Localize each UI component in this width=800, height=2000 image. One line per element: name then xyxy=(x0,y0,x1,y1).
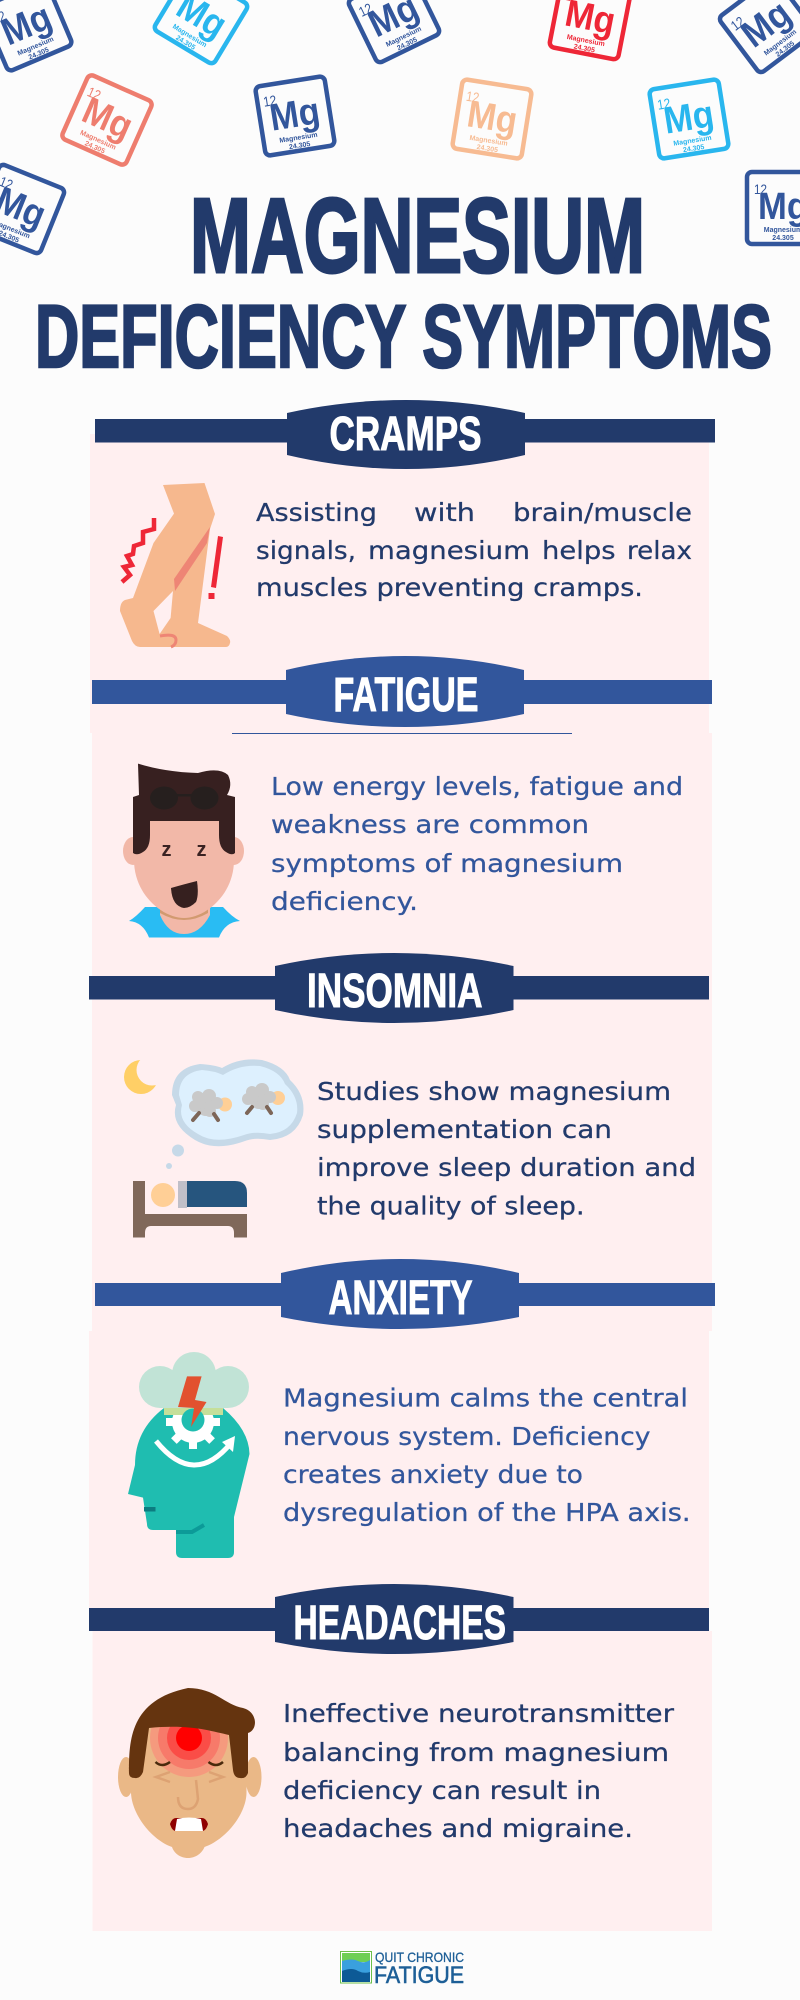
text: cramps description: magnesium xyxy=(368,536,530,565)
element tile: peach: 12 xyxy=(465,88,481,106)
element tile: peach: Magnesium xyxy=(469,135,508,148)
icon: man with headache xyxy=(118,1688,262,1858)
icon: sleeping man: z xyxy=(162,839,172,861)
element tile: salmon xyxy=(61,74,153,166)
element tile: cyan, top xyxy=(153,0,249,65)
text: fatigue description: deficiency. xyxy=(271,887,418,916)
element tile: blue, second row: Mg xyxy=(267,90,323,140)
element tile: salmon: 12 xyxy=(85,84,104,104)
banner: headaches xyxy=(89,1584,709,1654)
logo: Quit Chronic Fatigue xyxy=(340,1949,464,1989)
banner: fatigue xyxy=(92,656,712,727)
banner: cramps: CRAMPS xyxy=(330,408,482,461)
element tile: cyan, second row: Mg xyxy=(661,93,717,143)
element tile: peach xyxy=(452,79,532,159)
element tile: cyan, second row: 12 xyxy=(656,95,672,113)
text: anxiety description: nervous system. Deficiency xyxy=(283,1422,651,1451)
text: cramps description: brain/muscle xyxy=(513,498,692,527)
banner: cramps xyxy=(95,400,715,469)
text: insomnia description: the quality of sleep. xyxy=(317,1192,584,1220)
element tile: salmon: Magnesium xyxy=(79,130,117,152)
banner: anxiety xyxy=(95,1259,715,1329)
text: fatigue description: symptoms of magnesium xyxy=(271,849,623,878)
text: cramps description: signals, xyxy=(256,536,356,565)
element tile: red, top: 24.305 xyxy=(573,43,595,54)
text: cramps description: with xyxy=(414,498,475,527)
element tile: blue, top right: Magnesium xyxy=(763,29,798,57)
element tile: cyan, second row xyxy=(649,79,729,159)
text: fatigue description: weakness are common xyxy=(271,810,589,839)
title xyxy=(35,177,772,386)
banner: anxiety: ANXIETY xyxy=(328,1272,472,1325)
element tile: blue, second row: 12 xyxy=(262,92,278,110)
text: anxiety description: creates anxiety due to xyxy=(283,1460,583,1489)
element tile: blue, second row xyxy=(255,76,335,156)
fatigue divider line xyxy=(232,733,572,734)
element tile: blue, right edge: 12 xyxy=(754,181,767,197)
text: anxiety description: dysregulation of the HPA axis. xyxy=(283,1498,690,1527)
element tile: salmon: 24.305 xyxy=(83,140,106,155)
element tile: blue, top right xyxy=(718,0,800,74)
text: insomnia description xyxy=(317,1077,696,1220)
element tile: blue, second row: 24.305 xyxy=(289,141,311,151)
element tile: blue, top right: 24.305 xyxy=(775,40,796,59)
panel: anxiety xyxy=(89,1331,709,1631)
icon: head with storm cloud and gear xyxy=(128,1352,250,1558)
text: anxiety description xyxy=(283,1384,690,1527)
banner: insomnia: INSOMNIA xyxy=(307,965,482,1018)
text: headaches description xyxy=(283,1699,675,1843)
element tile: cyan, top: 24.305 xyxy=(174,35,196,52)
element tile: blue, right edge xyxy=(747,172,800,244)
panel: fatigue and insomnia xyxy=(92,733,712,1331)
text: fatigue description: Low energy levels, fatigue and xyxy=(271,772,683,801)
text: cramps description: relax xyxy=(627,536,692,565)
text: cramps description: Assisting xyxy=(256,498,377,527)
element tile: cyan, second row: 24.305 xyxy=(683,144,705,154)
element tile: red, top xyxy=(549,0,631,60)
element tile: blue, left edge xyxy=(0,163,66,255)
element tile: blue, top right: 12 xyxy=(728,13,748,34)
text: insomnia description: supplementation can xyxy=(317,1115,612,1144)
element tile: cyan, top: Magnesium xyxy=(171,23,208,49)
element tile: peach: 24.305 xyxy=(476,144,498,154)
element tile: blue, top left xyxy=(0,0,73,72)
text: headaches description: balancing from magnesium xyxy=(283,1738,669,1767)
banner: headaches: HEADACHES xyxy=(294,1597,506,1650)
element tile: blue, second row: Magnesium xyxy=(279,132,318,145)
panel: cramps xyxy=(90,434,709,733)
icon: sleeping man xyxy=(123,764,244,938)
text: cramps description: helps xyxy=(542,536,616,565)
element tile: blue, top centre: Magnesium xyxy=(385,26,423,49)
banner: insomnia xyxy=(89,953,709,1023)
element tile: salmon: Mg xyxy=(76,90,139,148)
banner: fatigue: FATIGUE xyxy=(334,669,478,722)
element tile: red, top: Magnesium xyxy=(566,34,605,48)
element tile: blue, top left: Magnesium xyxy=(17,36,55,57)
icon: cramping legs xyxy=(120,483,230,647)
element tile: cyan, second row: Magnesium xyxy=(673,135,712,148)
text: headaches description: headaches and migraine. xyxy=(283,1814,633,1843)
text: anxiety description: Magnesium calms the central xyxy=(283,1384,688,1412)
icon: sleeper dreaming of sheep xyxy=(124,1054,303,1238)
panel: headaches xyxy=(92,1631,712,1931)
element tile: blue, top centre xyxy=(347,0,441,64)
text: insomnia description: Studies show magnesium xyxy=(317,1077,671,1106)
element tile: blue, right edge: 24.305 xyxy=(772,235,794,242)
text: cramps description: muscles preventing cramps. xyxy=(256,573,643,602)
element tile: peach: Mg xyxy=(464,93,520,143)
element tile: blue, top centre: 24.305 xyxy=(396,37,419,52)
icon: sleeping man: z xyxy=(196,839,206,861)
element tile: blue, top left: 24.305 xyxy=(28,47,50,61)
text: cramps description xyxy=(256,498,692,602)
logo: Quit Chronic Fatigue: FATIGUE xyxy=(374,1962,464,1989)
text: headaches description: deficiency can result in xyxy=(283,1776,601,1805)
text: insomnia description: improve sleep duration and xyxy=(317,1153,696,1182)
logo: Quit Chronic Fatigue: QUIT CHRONIC xyxy=(375,1949,464,1965)
text: headaches description: Ineffective neurotransmitter xyxy=(283,1699,675,1728)
text: fatigue description xyxy=(271,772,683,916)
